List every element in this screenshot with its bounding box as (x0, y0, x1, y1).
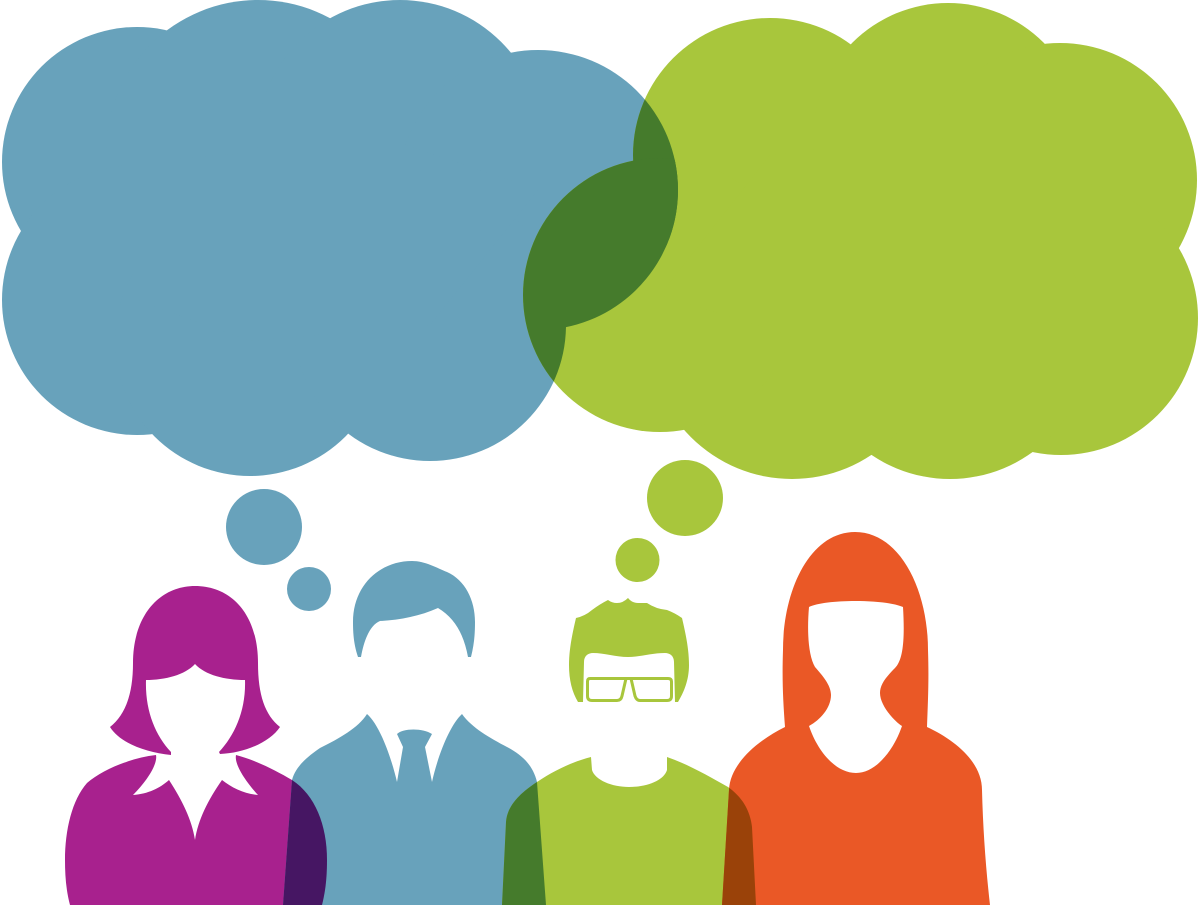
person: man with glasses in green (502, 598, 756, 905)
thought bubble: small green (616, 538, 660, 582)
overlap: man and glasses man (502, 782, 546, 905)
cloud overlap: dark green (523, 100, 678, 382)
thought bubble: small blue (287, 567, 331, 611)
man body (283, 714, 546, 905)
overlap: glasses man and hooded woman (722, 788, 756, 905)
glasses (588, 678, 672, 700)
glasses man body (502, 757, 756, 905)
thought cloud: blue (2, 0, 678, 476)
overlap: woman and man (283, 780, 327, 905)
person: hooded woman in orange (722, 532, 990, 905)
man hair (353, 561, 475, 657)
thought bubble: large blue (226, 489, 302, 565)
person: woman in purple (65, 586, 327, 905)
person: man in blue suit (283, 561, 546, 905)
woman body (65, 755, 327, 905)
glasses man hair (569, 598, 689, 702)
woman hair (110, 586, 280, 755)
thought bubble: large green (647, 460, 723, 536)
thought cloud: green (523, 3, 1198, 479)
